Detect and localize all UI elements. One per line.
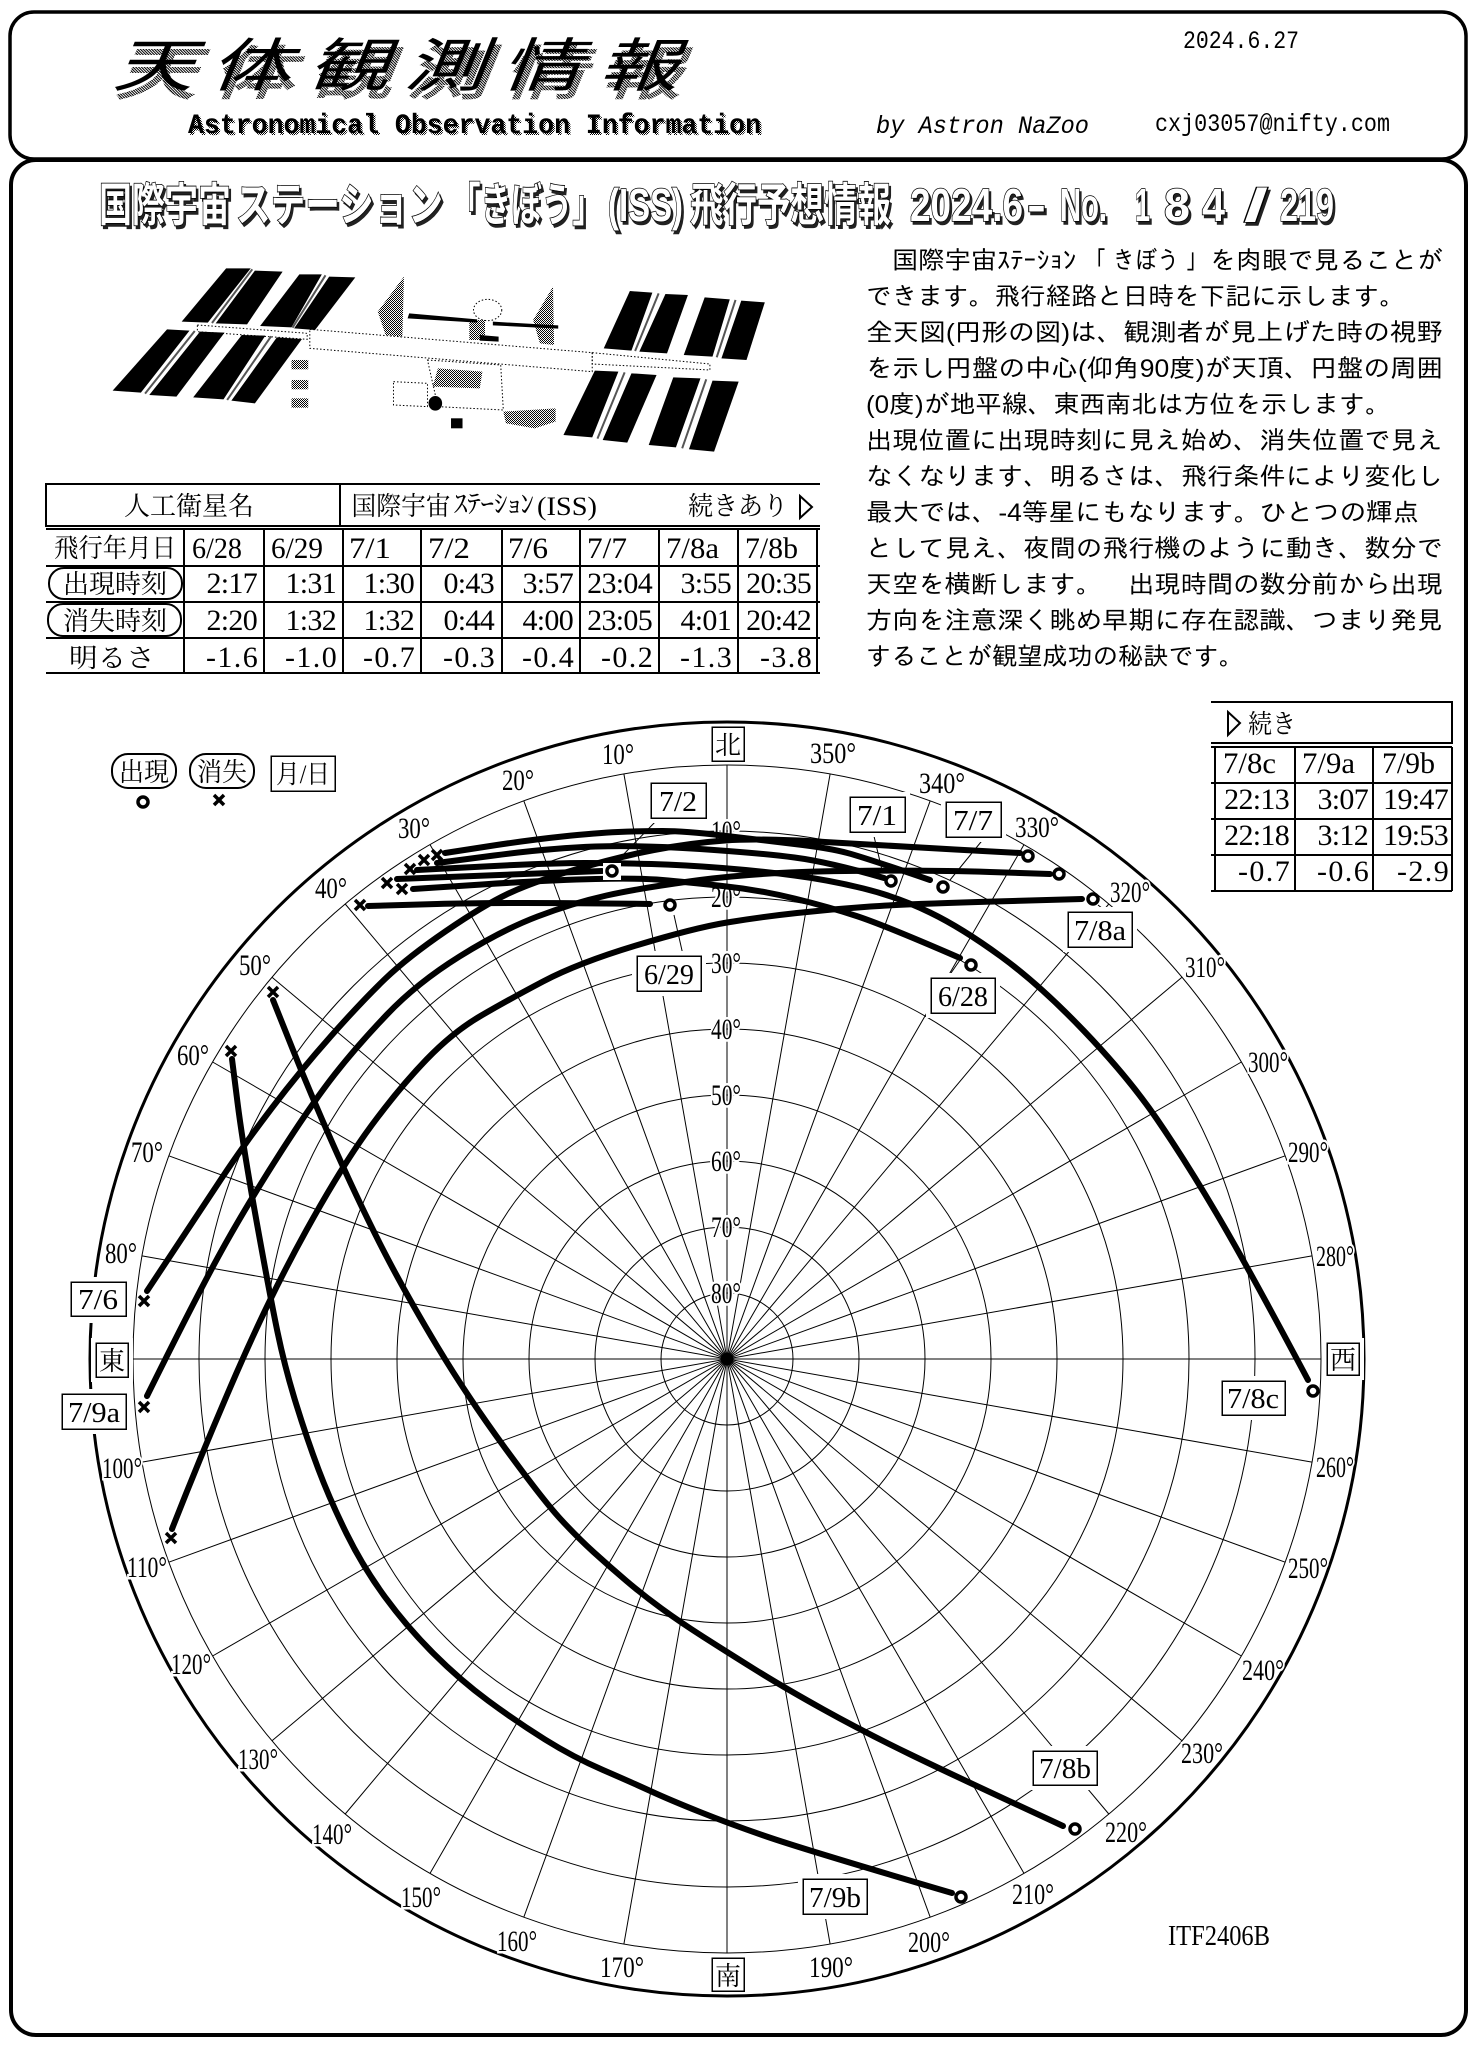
table: continuation: 7/9a	[1302, 747, 1355, 780]
text block: explanation: 「 きぼう 」	[1084, 247, 1208, 275]
disappearance markers	[139, 850, 442, 1543]
date label: 7/8c: 7/8c	[1227, 1383, 1279, 1415]
table: satellite name header: 人工衛星名	[124, 492, 254, 521]
heading: ISS flight forecast title: /	[1246, 182, 1270, 234]
azimuth labels: 100°	[102, 1452, 142, 1485]
date label: 7/8a	[1063, 907, 1137, 952]
table: flight times and brightness: 7/7	[587, 532, 627, 565]
table: flight times and brightness: 0:43	[443, 567, 494, 600]
text block: explanation: (0度)が地平線、東西南北は方位を示します。	[866, 391, 1391, 419]
table: flight times and brightness: 23:04	[587, 567, 653, 600]
heading: ISS flight forecast title: -	[1027, 179, 1046, 231]
table: continuation: 7/9b	[1382, 747, 1435, 780]
text block: explanation: なくなります、明るさは、飛行条件により変化し	[866, 463, 1443, 491]
heading: ISS flight forecast title: (ISS)	[608, 179, 683, 231]
table: continuation	[1211, 702, 1452, 891]
date label: 7/8c	[1217, 1376, 1290, 1420]
azimuth labels: 140°	[312, 1818, 352, 1851]
direction label: north	[712, 727, 744, 761]
date label: 7/6: 7/6	[78, 1284, 118, 1316]
date label: 7/2: 7/2	[659, 786, 697, 818]
text block: explanation: 方向を注意深く眺め早期に存在認識、つまり発見	[866, 607, 1443, 635]
azimuth labels: 150°	[401, 1881, 441, 1914]
azimuth labels: 30°	[398, 812, 430, 845]
date label: 7/9b	[798, 1874, 872, 1919]
heading: ISS flight forecast title: 国際宇宙	[101, 182, 233, 234]
table: flight times and brightness: 2:20	[206, 604, 257, 637]
direction label: east	[91, 1338, 133, 1382]
date label: 7/1: 7/1	[857, 800, 897, 832]
table: satellite name header: (ISS)	[537, 492, 597, 521]
date label: 7/2	[646, 778, 711, 823]
elevation labels: 10°	[711, 815, 741, 848]
heading: ISS flight forecast title: 8	[1164, 179, 1190, 231]
azimuth labels: 120°	[171, 1648, 211, 1681]
heading: ISS flight forecast title: ステーション	[236, 179, 443, 231]
text block: explanation: することが観望成功の秘訣です。	[866, 643, 1244, 671]
table: continuation: -0.6	[1317, 855, 1369, 888]
date label: 7/8b	[1028, 1746, 1102, 1790]
table: flight times and brightness: 7/2	[428, 532, 470, 565]
elevation labels: 30°	[711, 947, 741, 980]
subtitle: Astronomical Observation Information	[188, 111, 761, 142]
table: flight times and brightness: 6/28	[192, 532, 242, 565]
heading: ISS flight forecast title: 「きぼう」	[452, 182, 605, 234]
table: flight times and brightness: 2:17	[206, 567, 258, 600]
heading: ISS flight forecast title: (ISS)	[610, 182, 685, 234]
azimuth labels: 330°	[1015, 811, 1059, 844]
table: flight times and brightness: 0:44	[443, 604, 495, 637]
table: flight times and brightness: 出現時刻	[63, 570, 167, 599]
azimuth labels: 200°	[908, 1926, 950, 1959]
date label: 7/1	[845, 792, 910, 837]
date: 2024.6.27	[1183, 27, 1299, 56]
table: flight times and brightness: -1.0	[285, 641, 336, 674]
azimuth labels: 40°	[315, 872, 347, 905]
table: continuation: 続き	[1248, 710, 1296, 739]
table: flight times and brightness: 飛行年月日	[54, 534, 176, 563]
heading: ISS flight forecast title: 「きぼう」	[450, 179, 603, 231]
table: flight times and brightness: 7/1	[349, 532, 391, 565]
table: flight times and brightness: 20:42	[746, 604, 811, 637]
azimuth labels: 260°	[1316, 1451, 1354, 1484]
azimuth labels: 70°	[131, 1136, 163, 1169]
date label: 7/8a: 7/8a	[1074, 915, 1126, 947]
date label: 7/9a	[57, 1389, 131, 1434]
table: flight times and brightness: -0.7	[363, 641, 415, 674]
azimuth labels: 10°	[602, 738, 634, 771]
azimuth labels: 190°	[809, 1951, 853, 1984]
email: cxj03057@nifty.com	[1155, 110, 1390, 139]
heading: ISS flight forecast title: 219	[1282, 182, 1336, 234]
direction label: west: 西	[1330, 1346, 1356, 1375]
date label: 7/7	[941, 797, 1006, 842]
date label: 7/9a: 7/9a	[68, 1397, 120, 1429]
table: continuation: 3:07	[1317, 783, 1369, 816]
subtitle: Astronomical Observation Information	[190, 113, 763, 144]
azimuth labels	[102, 737, 1354, 1984]
azimuth labels: 340°	[919, 767, 965, 800]
table: satellite name header: 続きあり	[688, 492, 788, 521]
date label: 7/9b: 7/9b	[809, 1882, 861, 1914]
heading: ISS flight forecast title: 1	[1137, 182, 1152, 234]
azimuth labels: 20°	[502, 764, 534, 797]
elevation labels: 40°	[711, 1013, 741, 1046]
azimuth labels: 300°	[1248, 1046, 1288, 1079]
azimuth labels: 50°	[239, 949, 271, 982]
azimuth labels: 110°	[127, 1551, 167, 1584]
heading: ISS flight forecast title: 2024.6	[910, 179, 1023, 231]
table: flight times and brightness: 7/6	[508, 532, 548, 565]
elevation labels: 20°	[711, 881, 741, 914]
heading: ISS flight forecast title: No.	[1062, 182, 1109, 234]
table: flight times and brightness: 明るさ	[69, 644, 155, 673]
table: flight times and brightness	[46, 529, 820, 674]
date label: 6/28	[926, 973, 1000, 1018]
text block: explanation: 国際宇宙ｽﾃｰｼｮﾝ	[892, 247, 1076, 275]
legend	[112, 754, 335, 807]
heading: ISS flight forecast title: -	[1029, 182, 1048, 234]
table: flight times and brightness: 7/8a	[666, 532, 719, 565]
title: astronomical observation information in Japanese: 天体観測情報	[107, 34, 699, 99]
table: continuation: 22:18	[1224, 819, 1289, 852]
text block: explanation: できます。飛行経路と日時を下記に示します。	[866, 283, 1405, 311]
table: flight times and brightness: -0.4	[522, 641, 574, 674]
document code: ITF2406B	[1168, 1920, 1270, 1952]
table: continuation: 22:13	[1224, 783, 1289, 816]
heading: ISS flight forecast title: 飛行予想情報	[690, 179, 891, 231]
azimuth labels: 130°	[238, 1743, 278, 1776]
panel: header frame	[10, 12, 1466, 159]
illustration: international space station	[113, 268, 765, 452]
elevation labels: 50°	[711, 1079, 741, 1112]
text block: explanation	[866, 247, 1443, 671]
table: continuation: 19:47	[1383, 783, 1449, 816]
table: satellite name header: ｽﾃｰｼｮﾝ	[454, 490, 534, 519]
azimuth labels: 230°	[1181, 1737, 1223, 1770]
chart: all-sky polar grid	[90, 722, 1364, 1996]
heading: ISS flight forecast title: 8	[1166, 182, 1192, 234]
azimuth labels: 80°	[105, 1237, 137, 1270]
table: flight times and brightness: -0.3	[443, 641, 494, 674]
date label: 6/29	[632, 951, 706, 996]
heading: ISS flight forecast title: 1	[1135, 179, 1150, 231]
table: flight times and brightness: 3:57	[522, 567, 574, 600]
azimuth labels: 210°	[1012, 1878, 1054, 1911]
text block: explanation: として見え、夜間の飛行機のように動き、数分で	[866, 535, 1443, 563]
date label: 6/29: 6/29	[644, 959, 694, 991]
table: flight times and brightness: 3:55	[680, 567, 731, 600]
table: flight times and brightness: 4:00	[522, 604, 573, 637]
elevation labels: 70°	[711, 1211, 741, 1244]
heading: ISS flight forecast title: 国際宇宙	[99, 179, 231, 231]
azimuth labels: 60°	[177, 1039, 209, 1072]
azimuth labels: 290°	[1288, 1136, 1328, 1169]
heading: ISS flight forecast title: No.	[1060, 179, 1107, 231]
text block: explanation: 出現位置に出現時刻に見え始め、消失位置で見え	[866, 427, 1443, 455]
date label: 7/7: 7/7	[953, 805, 993, 837]
heading: ISS flight forecast title: ステーション	[238, 182, 445, 234]
legend: 消失	[197, 758, 247, 787]
table: flight times and brightness: -0.2	[601, 641, 652, 674]
heading: ISS flight forecast title: 飛行予想情報	[692, 182, 893, 234]
table: flight times and brightness: 消失時刻	[63, 607, 167, 636]
table: continuation: 3:12	[1317, 819, 1368, 852]
title: astronomical observation information in Japanese: 天体観測情報	[110, 42, 702, 107]
table: flight times and brightness: 6/29	[271, 532, 323, 565]
direction label: west	[1322, 1338, 1364, 1380]
elevation labels: 60°	[711, 1145, 741, 1178]
legend: 出現	[119, 758, 169, 787]
table: continuation: -2.9	[1397, 855, 1448, 888]
table: continuation: 7/8c	[1223, 747, 1276, 780]
azimuth labels: 250°	[1288, 1552, 1328, 1585]
table: flight times and brightness: 1:32	[363, 604, 414, 637]
flight tracks	[147, 831, 1308, 1893]
text block: explanation: を示し円盤の中心(仰角90度)が天頂、円盤の周囲	[866, 355, 1443, 383]
table: flight times and brightness: 1:30	[363, 567, 414, 600]
azimuth labels: 310°	[1185, 951, 1225, 984]
azimuth labels: 220°	[1105, 1816, 1147, 1849]
table: continuation: -0.7	[1238, 855, 1290, 888]
elevation labels: 80°	[711, 1277, 741, 1310]
date label: 6/28: 6/28	[938, 981, 988, 1013]
author: by Astron NaZoo	[876, 112, 1089, 141]
table: satellite name header	[46, 484, 820, 526]
azimuth labels: 280°	[1316, 1240, 1354, 1273]
heading: ISS flight forecast title: 2024.6	[912, 182, 1025, 234]
heading: ISS flight forecast title: /	[1244, 179, 1268, 231]
table: flight times and brightness: 4:01	[680, 604, 731, 637]
heading: ISS flight forecast title: 4	[1202, 179, 1225, 231]
azimuth labels: 320°	[1110, 876, 1150, 909]
table: flight times and brightness: 1:31	[285, 567, 336, 600]
table: satellite name header: 国際宇宙	[352, 492, 450, 521]
heading: ISS flight forecast title	[99, 179, 1336, 234]
azimuth labels: 240°	[1242, 1654, 1284, 1687]
table: flight times and brightness: 7/8b	[745, 532, 798, 565]
table: flight times and brightness: -3.8	[760, 641, 811, 674]
elevation labels	[711, 815, 741, 1310]
text block: explanation: 天空を横断します。 出現時間の数分前から出現	[866, 571, 1443, 599]
legend: 月/日	[276, 760, 330, 789]
azimuth labels: 350°	[810, 737, 856, 770]
appearance markers	[603, 851, 1318, 1902]
text block: explanation: 最大では、-4等星にもなります。ひとつの輝点	[866, 499, 1419, 527]
direction label: north: 北	[715, 731, 741, 760]
table: flight times and brightness: 20:35	[746, 567, 811, 600]
date label: 7/8b: 7/8b	[1039, 1753, 1091, 1785]
table: continuation: 19:53	[1383, 819, 1448, 852]
text block: explanation: 全天図(円形の図)は、観測者が見上げた時の視野	[866, 319, 1443, 347]
direction label: east: 東	[99, 1347, 125, 1376]
table: flight times and brightness: -1.6	[206, 641, 258, 674]
leader lines	[618, 819, 1107, 973]
direction label: south: 南	[715, 1962, 741, 1991]
heading: ISS flight forecast title: 4	[1204, 182, 1227, 234]
table: flight times and brightness: -1.3	[680, 641, 731, 674]
table: flight times and brightness: 23:05	[587, 604, 652, 637]
text block: explanation: を肉眼で見ることが	[1210, 247, 1443, 275]
heading: ISS flight forecast title: 219	[1280, 179, 1334, 231]
azimuth labels: 160°	[497, 1925, 537, 1958]
date label: 7/6	[66, 1277, 131, 1323]
azimuth labels: 170°	[600, 1951, 644, 1984]
table: flight times and brightness: 1:32	[285, 604, 336, 637]
